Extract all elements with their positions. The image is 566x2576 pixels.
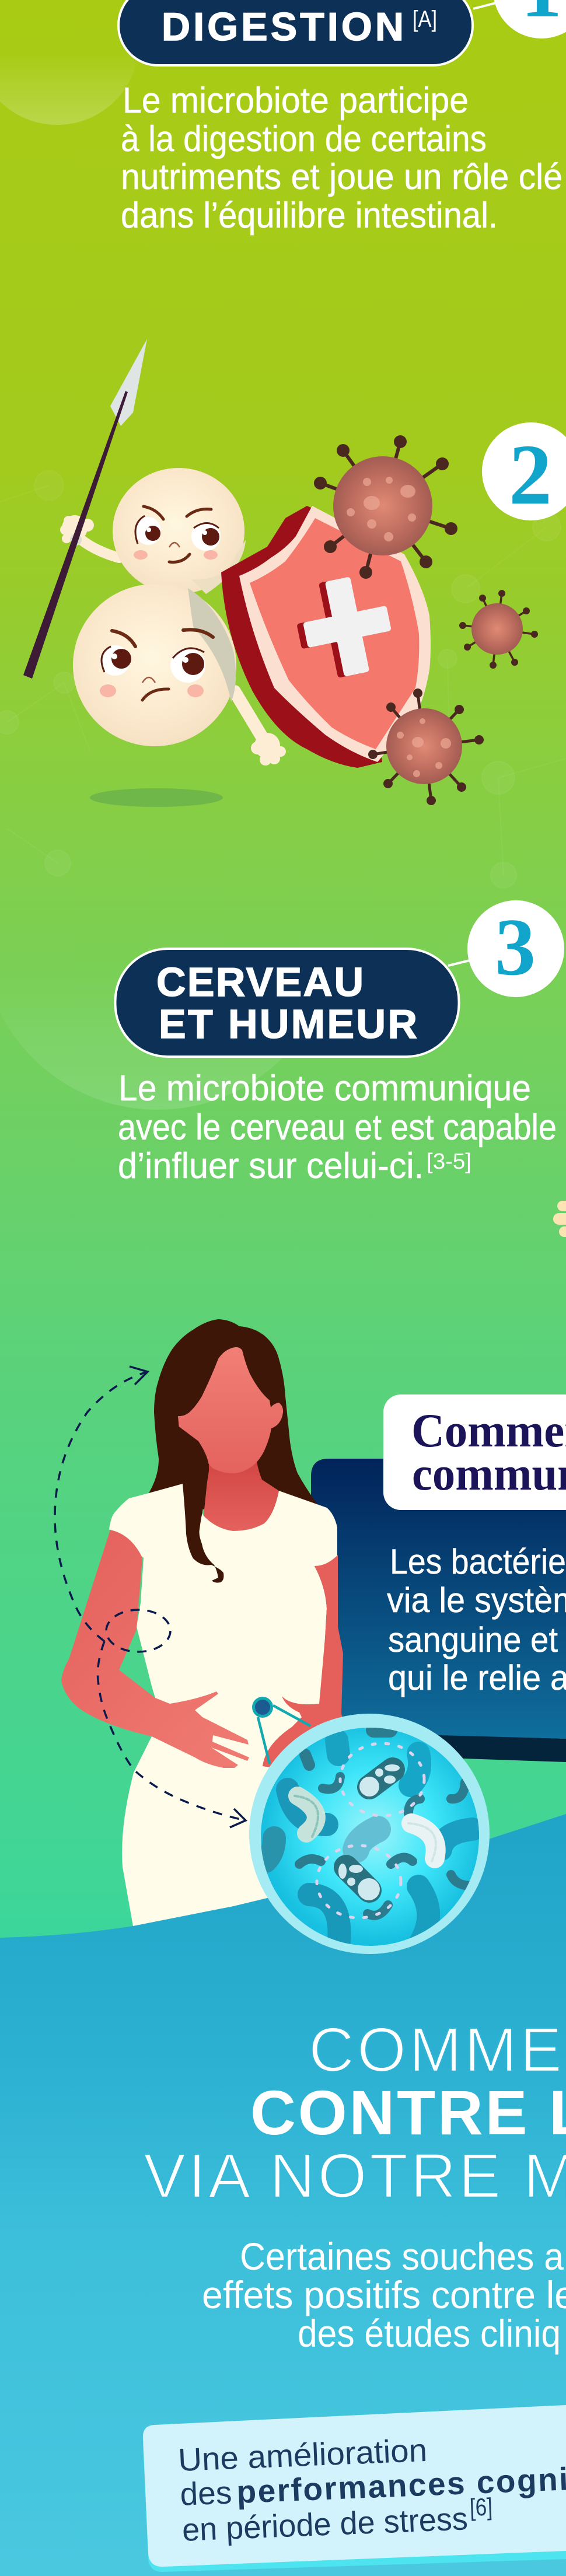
white dress <box>109 1484 337 1926</box>
dashed arrow to gut <box>97 1641 246 1827</box>
number badge 3: 3 <box>495 902 536 992</box>
decorative bubble top left <box>0 0 139 125</box>
hair strand <box>169 1424 223 1583</box>
panel heading <box>383 1394 566 1510</box>
virus small <box>459 590 538 669</box>
card text: [6] <box>469 2493 493 2521</box>
spear <box>23 339 147 679</box>
magnified microbiota lens <box>249 1714 490 1954</box>
bacteria inside the lens <box>265 1730 473 1946</box>
hand fragment at right edge <box>553 1201 566 1237</box>
number badge 2 <box>482 422 566 523</box>
text block: digestion: dans l’équilibre intestinal. <box>121 195 498 236</box>
benefit card <box>143 2405 566 2572</box>
pill heading: digestion <box>118 0 473 65</box>
magnifier pin <box>252 1697 310 1764</box>
face <box>178 1347 283 1473</box>
card text: performances cogni <box>236 2460 566 2510</box>
pill heading: digestion: DIGESTION <box>162 5 404 49</box>
left arm and hand <box>61 1530 249 1768</box>
illustration: woman <box>55 1319 350 1926</box>
pill heading: digestion: [A] <box>413 6 437 32</box>
section 3: cerveau et humeur <box>116 900 564 1186</box>
pill heading: cerveau et humeur <box>116 949 459 1057</box>
section title <box>144 2014 566 2211</box>
dashed circle on belly <box>106 1610 170 1652</box>
connector line 1 <box>473 3 496 9</box>
card text: Une amélioration <box>177 2432 428 2478</box>
text block: cerveau: [3-5] <box>427 1149 471 1174</box>
background: green gradient <box>0 0 566 1949</box>
raised arm and hand <box>60 515 119 558</box>
virus medium <box>368 688 484 805</box>
text block: digestion <box>121 81 562 236</box>
section title: VIA NOTRE M <box>144 2140 566 2211</box>
panel body text <box>387 1542 566 1697</box>
info panel: navy box and shadow <box>311 1394 566 1762</box>
bottom bacteria character <box>73 584 236 746</box>
intro paragraph <box>202 2235 566 2355</box>
faint molecular network background <box>0 471 566 888</box>
panel body text: sanguine et <box>388 1620 558 1659</box>
shadow under characters <box>90 788 223 807</box>
number badge 3 <box>467 900 564 997</box>
number badge 1 <box>493 0 566 39</box>
text block: cerveau: Le microbiote communique <box>118 1068 531 1109</box>
text block: digestion: Le microbiote participe <box>123 81 469 121</box>
card text: des <box>179 2474 232 2512</box>
lower arm and hand <box>235 691 286 766</box>
neck <box>204 1462 279 1531</box>
text block: cerveau <box>118 1068 557 1186</box>
hair back <box>140 1319 327 1517</box>
card text: en période de stress <box>181 2500 469 2548</box>
blue wave section background <box>0 1814 566 2576</box>
right arm and hand <box>263 1555 350 1768</box>
number badge 2: 2 <box>509 427 552 523</box>
dashed arrow to head <box>55 1366 148 1641</box>
illustration: bacteria defending with shield <box>23 339 538 807</box>
top bacteria character <box>113 468 246 594</box>
pill heading: cerveau et humeur: CERVEAU <box>156 959 364 1005</box>
decorative bubble behind section 3 <box>0 757 334 1110</box>
connector line 3 <box>448 960 470 966</box>
shield with cross <box>221 506 431 768</box>
card text <box>177 2426 566 2548</box>
pill heading: cerveau et humeur: ET HUMEUR <box>159 1001 417 1047</box>
section 1: digestion <box>118 0 566 236</box>
text block: cerveau: d’influer sur celui-ci. <box>118 1146 424 1186</box>
virus large <box>314 435 457 579</box>
text block: digestion: à la digestion de certains <box>121 119 487 159</box>
